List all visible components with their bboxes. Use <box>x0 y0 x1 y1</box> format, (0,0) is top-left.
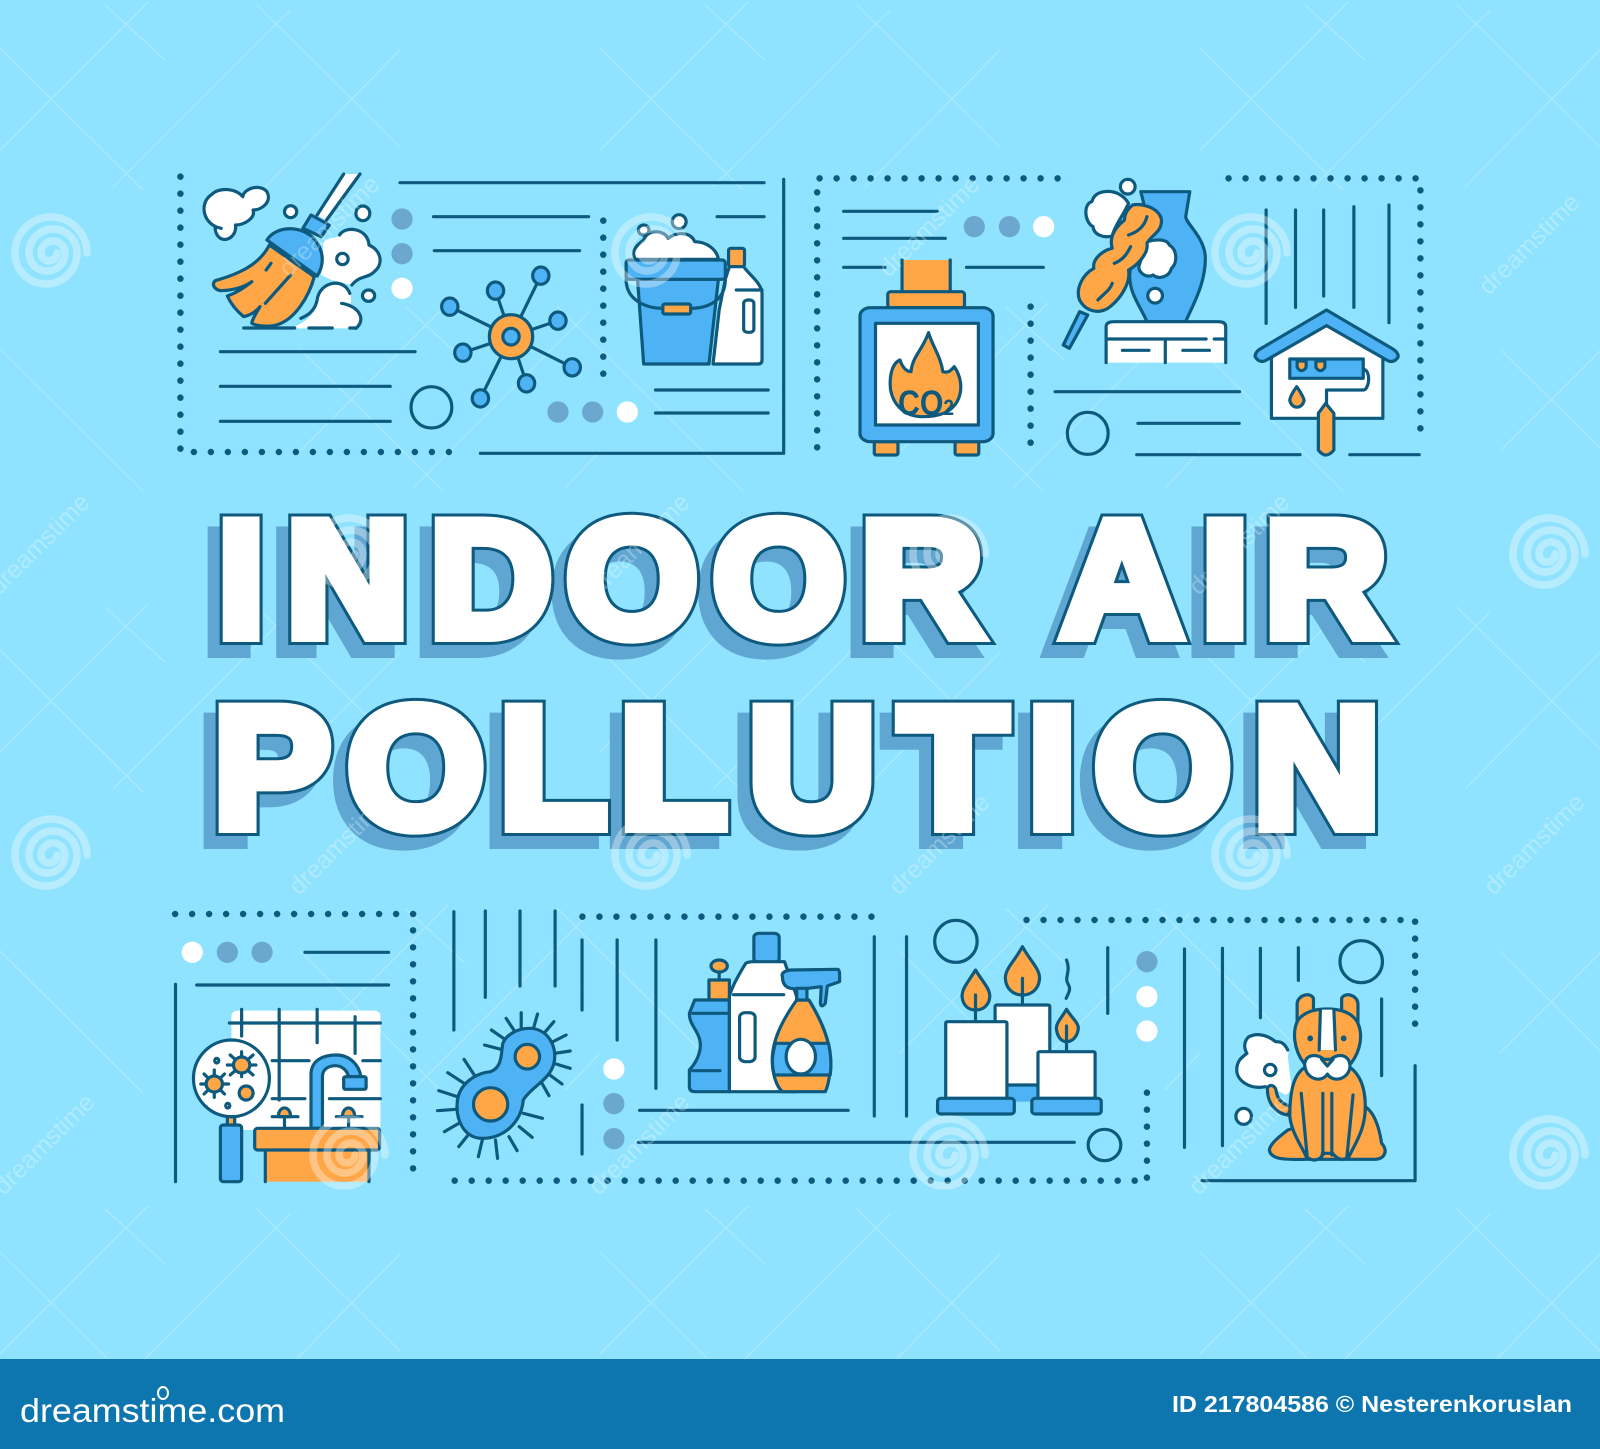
dotted frame <box>180 177 603 452</box>
title white face: INDOOR AIR <box>218 487 1387 671</box>
watermark overlay: dreamstime <box>1183 488 1295 600</box>
title shadow: INDOOR AIR <box>206 500 1375 684</box>
watermark overlay: dreamstime <box>1473 188 1585 300</box>
panel: bottom left bathroom, bacteria, cleaners <box>175 911 1136 1182</box>
line frame and text lines <box>874 937 1415 1181</box>
watermark overlay: dreamstime <box>283 788 395 900</box>
footer credit: ID 217804586 © Nesterenkoruslan <box>1172 1391 1572 1417</box>
watermark overlay: dreamstime <box>873 170 985 282</box>
watermark overlay <box>0 170 1590 1200</box>
footer logo: dreamstime.com <box>20 1392 285 1429</box>
title shadow <box>201 500 1375 876</box>
title white face <box>213 487 1387 863</box>
decorative dots <box>182 942 624 1149</box>
watermark overlay: dreamstime <box>583 1088 695 1200</box>
icon label: CO2 text: CO2 <box>898 384 954 423</box>
dotted frame <box>175 914 1136 1181</box>
footer bar <box>0 1359 1600 1449</box>
dotted frame <box>817 178 1420 449</box>
line frame and text lines <box>844 205 1419 455</box>
icon: duster and vase <box>1063 179 1226 363</box>
watermark overlay: dreamstime <box>583 488 695 600</box>
icon: bucket and detergent <box>626 215 762 364</box>
line frame and text lines <box>220 179 784 453</box>
watermark overlay: dreamstime <box>883 788 995 900</box>
title <box>201 487 1387 876</box>
panel: top right furnace, dusting and painting <box>817 178 1420 455</box>
title outline: POLLUTION <box>213 671 1381 863</box>
watermark overlay: dreamstime <box>1183 1088 1295 1200</box>
icon: bacterium <box>438 1013 570 1158</box>
icon: mould in bathroom <box>193 1009 380 1182</box>
decorative circles and dots <box>935 920 1382 1161</box>
decorative circles and dots <box>964 216 1108 454</box>
icon: cleaning product bottles <box>689 933 840 1092</box>
watermark overlay: dreamstime <box>273 170 385 282</box>
title outline: INDOOR AIR <box>218 487 1387 671</box>
icon: house and paint roller <box>1255 310 1398 455</box>
panel: bottom right candles and pet <box>874 920 1415 1181</box>
dotted frame <box>1027 920 1415 1179</box>
icon: broom sweeping dust <box>204 174 380 328</box>
decorative circles and dots <box>391 208 638 428</box>
title outline <box>213 487 1387 863</box>
icon: dog with dander <box>1236 995 1385 1160</box>
line frame and text lines <box>176 911 1074 1182</box>
title shadow: POLLUTION <box>201 684 1369 876</box>
watermark overlay: dreamstime <box>1478 788 1590 900</box>
title white face: POLLUTION <box>213 671 1381 863</box>
icon: CO2 furnace <box>860 260 993 455</box>
icon: scented candles <box>938 947 1101 1114</box>
panel: top left cleaning <box>180 174 784 453</box>
icon: particle network <box>442 267 580 407</box>
